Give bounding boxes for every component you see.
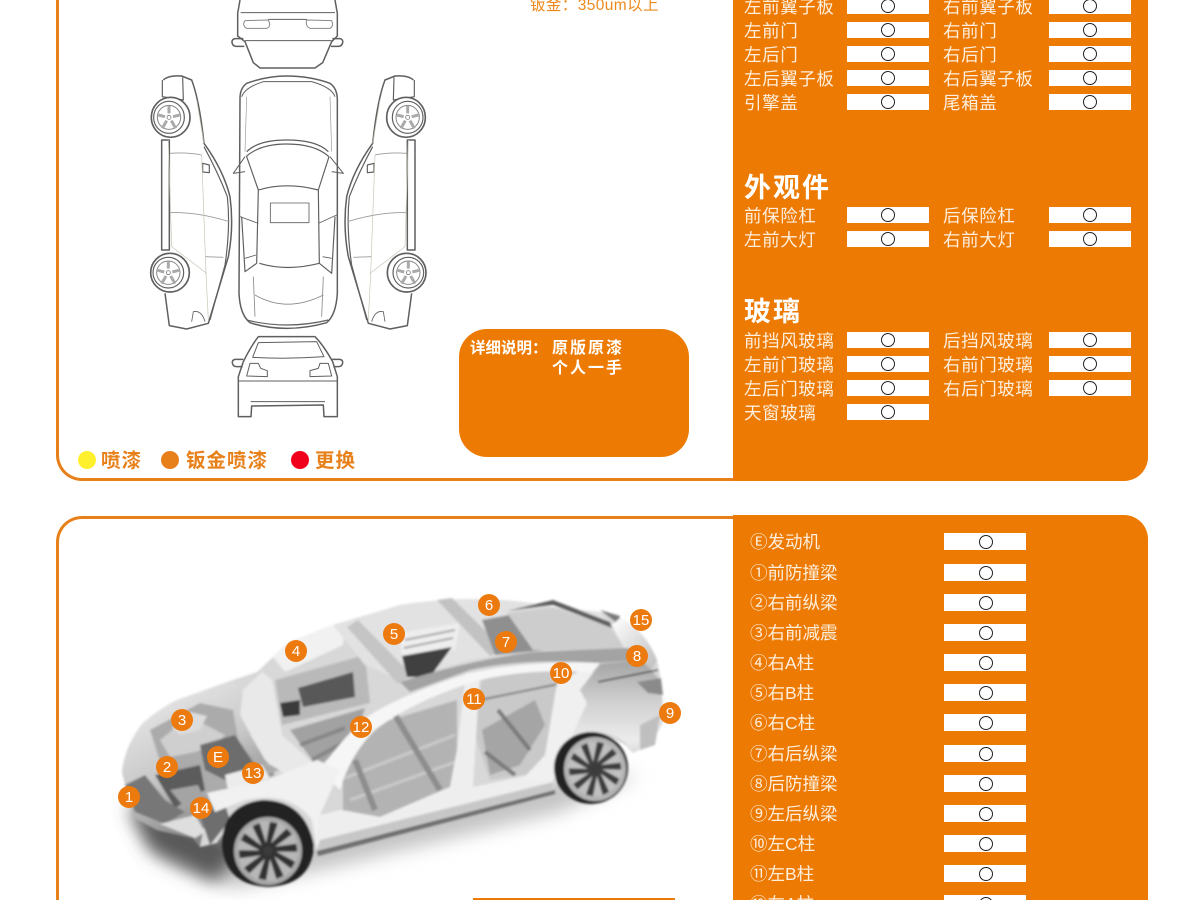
checklist: body panels — [744, 0, 1131, 113]
row: left rear rail — [750, 804, 1026, 824]
row: right rear rail — [750, 744, 1026, 764]
marker 14: 14 — [193, 800, 209, 817]
row: headlights: 右前大灯 — [943, 230, 1015, 250]
row: front doors — [744, 21, 1131, 41]
marker 2: 2 — [163, 759, 171, 776]
panel: exterior inspection — [56, 0, 1148, 481]
front view — [232, 0, 343, 68]
ground shadow — [128, 775, 640, 888]
row: windshields — [744, 331, 1131, 351]
row: rear door glass: 左后门玻璃 — [744, 379, 834, 399]
marker E — [207, 746, 229, 768]
marker 5: 5 — [390, 626, 398, 643]
row: sunroof: 天窗玻璃 — [744, 403, 816, 423]
row: front door glass: 右前门玻璃 — [943, 355, 1034, 375]
row: left B pillar: ⑪左B柱 — [750, 864, 814, 884]
row: rear doors: 右后门 — [943, 45, 997, 65]
row: headlights — [744, 230, 1131, 250]
row: bumpers: 前保险杠 — [744, 206, 816, 226]
row: left A pillar — [750, 894, 1026, 900]
row: front fenders — [744, 0, 1131, 17]
callout: detailed description — [459, 329, 689, 457]
marker 4 — [285, 640, 307, 662]
marker 12 — [350, 716, 372, 738]
row: right front strut: ③右前减震 — [750, 623, 838, 643]
row: hood and trunk: 引擎盖 — [744, 93, 798, 113]
right side view — [345, 76, 426, 329]
marker 9: 9 — [666, 705, 674, 722]
row: rear doors: 左后门 — [744, 45, 798, 65]
marker E: E — [213, 749, 223, 766]
marker 1 — [118, 786, 140, 808]
row: engine — [750, 532, 1026, 552]
front wheel — [222, 800, 314, 887]
row: front door glass: 左前门玻璃 — [744, 355, 834, 375]
legend: sheet metal label: 钣金喷漆 — [186, 450, 268, 472]
row: sunroof — [744, 403, 929, 423]
marker 6 — [478, 594, 500, 616]
text: description content — [552, 339, 624, 377]
row: right C pillar — [750, 713, 1026, 733]
row: rear doors — [744, 45, 1131, 65]
row: headlights: 左前大灯 — [744, 230, 816, 250]
marker 13 — [242, 762, 264, 784]
row: engine: Ⓔ发动机 — [750, 532, 820, 552]
row: right front rail — [750, 593, 1026, 613]
text: description content: 个人一手 — [552, 360, 624, 377]
row: rear crash beam: ⑧后防撞梁 — [750, 774, 838, 794]
row: bumpers — [744, 206, 1131, 226]
row: left rear rail: ⑨左后纵梁 — [750, 804, 838, 824]
row: rear fenders: 右后翼子板 — [943, 69, 1034, 89]
body silhouette — [122, 599, 663, 850]
checklist: structural parts — [750, 532, 1026, 900]
row: rear fenders — [744, 69, 1131, 89]
marker 12: 12 — [353, 719, 369, 736]
row: windshields: 后挡风玻璃 — [943, 331, 1034, 351]
row: front door glass — [744, 355, 1131, 375]
text: description label: 详细说明： — [470, 340, 548, 357]
left side view — [151, 76, 232, 329]
marker 10 — [550, 662, 572, 684]
marker 7 — [495, 631, 517, 653]
legend: replace — [291, 451, 309, 469]
marker 6: 6 — [485, 597, 493, 614]
illustration: car body structure — [118, 594, 681, 896]
marker 14 — [190, 797, 212, 819]
panel: exterior checklist background — [733, 0, 1148, 481]
marker 7: 7 — [502, 634, 510, 651]
row: bumpers: 后保险杠 — [943, 206, 1015, 226]
marker 10: 10 — [553, 665, 569, 682]
row: right A pillar: ④右A柱 — [750, 653, 814, 673]
legend: sheet metal — [161, 451, 179, 469]
row: front doors: 左前门 — [744, 21, 798, 41]
rear view — [232, 337, 343, 417]
heading: glass: 玻璃 — [744, 297, 802, 327]
row: right rear rail: ⑦右后纵梁 — [750, 744, 838, 764]
row: right front rail: ②右前纵梁 — [750, 593, 838, 613]
row: right B pillar: ⑤右B柱 — [750, 683, 814, 703]
roof and far side pillars — [333, 598, 657, 684]
legend: repair types — [78, 450, 356, 472]
row: left C pillar: ⑩左C柱 — [750, 834, 815, 854]
marker 15 — [630, 609, 652, 631]
legend: paint label: 喷漆 — [101, 450, 142, 472]
numbered markers — [118, 594, 681, 819]
row: rear door glass — [744, 379, 1131, 399]
marker 5 — [383, 623, 405, 645]
row: front crash beam — [750, 563, 1026, 583]
door sill and pillars — [207, 648, 642, 856]
marker 15: 15 — [633, 612, 649, 629]
panel: structure inspection — [56, 516, 1148, 900]
marker 11: 11 — [466, 691, 482, 708]
row: windshields: 前挡风玻璃 — [744, 331, 834, 351]
marker 2 — [156, 756, 178, 778]
marker 11 — [463, 688, 485, 710]
rear quarter panel — [553, 660, 663, 775]
legend: replace label: 更换 — [315, 450, 356, 472]
row: left B pillar — [750, 864, 1026, 884]
marker 9 — [659, 702, 681, 724]
row: hood and trunk — [744, 93, 1131, 113]
row: right A pillar — [750, 653, 1026, 673]
row: right front strut — [750, 623, 1026, 643]
row: front doors: 右前门 — [943, 21, 997, 41]
legend: paint — [78, 451, 96, 469]
row: rear fenders: 左后翼子板 — [744, 69, 834, 89]
windshield and front door frame — [240, 625, 370, 785]
marker 4: 4 — [292, 643, 300, 660]
top view — [233, 76, 343, 328]
marker 8: 8 — [633, 648, 641, 665]
panel: structure checklist background — [733, 515, 1148, 900]
diagram: car line drawing — [150, 0, 427, 418]
rear wheel — [554, 732, 628, 804]
marker 3 — [171, 709, 193, 731]
row: front crash beam: ①前防撞梁 — [750, 563, 838, 583]
heading: exterior parts: 外观件 — [744, 173, 831, 203]
marker 3: 3 — [178, 712, 186, 729]
row: right B pillar — [750, 683, 1026, 703]
hood and engine bay — [122, 680, 280, 847]
marker 1: 1 — [125, 789, 133, 806]
checklist: exterior parts — [744, 206, 1131, 250]
row: left C pillar — [750, 834, 1026, 854]
row: right C pillar: ⑥右C柱 — [750, 713, 815, 733]
row: rear crash beam — [750, 774, 1026, 794]
callout: structure description — [473, 898, 675, 900]
floor pan — [343, 665, 593, 817]
marker 13: 13 — [245, 765, 261, 782]
marker 8 — [626, 645, 648, 667]
row: hood and trunk: 尾箱盖 — [943, 93, 997, 113]
row: rear door glass: 右后门玻璃 — [943, 379, 1034, 399]
text: description content: 原版原漆 — [552, 340, 624, 357]
checklist: glass — [744, 331, 1131, 423]
